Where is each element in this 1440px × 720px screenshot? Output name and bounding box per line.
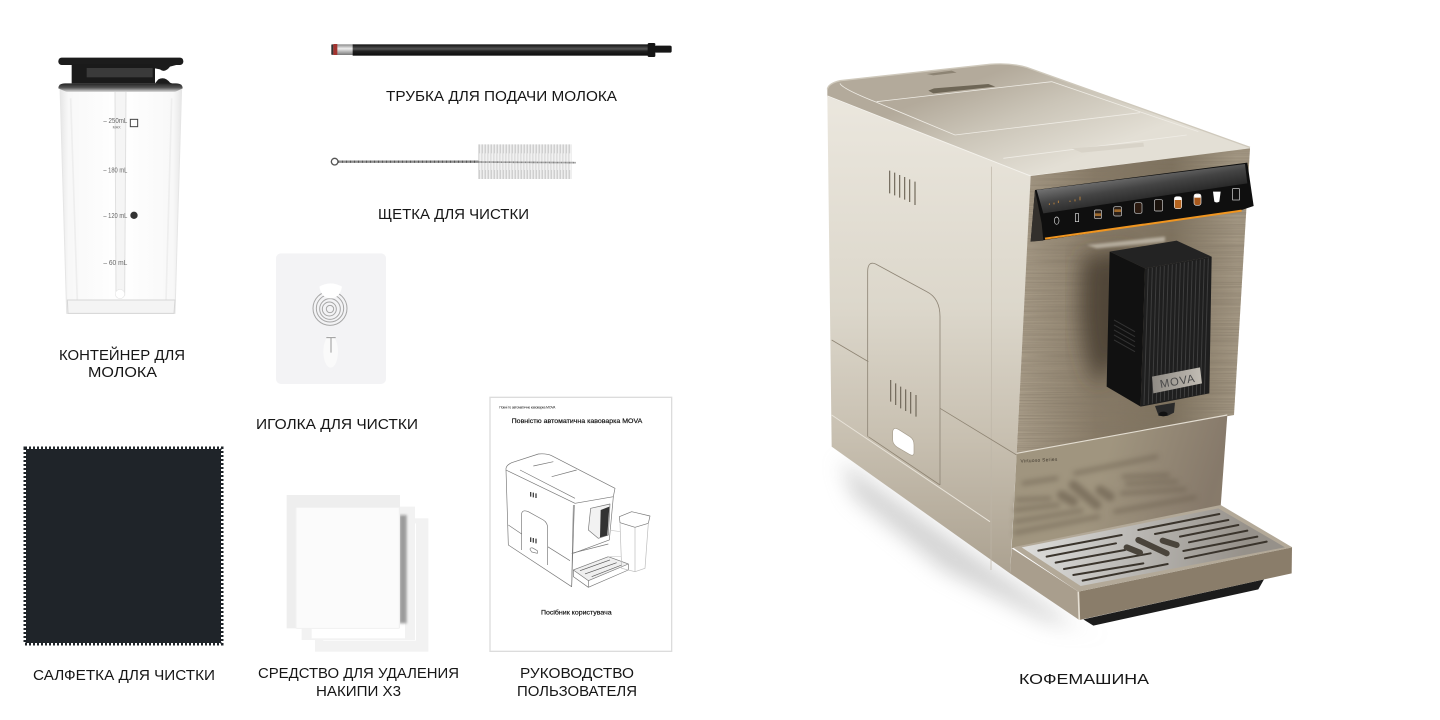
- label: milk tube: ТРУБКА ДЛЯ ПОДАЧИ МОЛОКА: [386, 89, 617, 105]
- label: coffee machine: КОФЕМАШИНА: [1019, 672, 1149, 688]
- milk container: [58, 58, 183, 313]
- tray slots: [1038, 514, 1267, 581]
- lower panel: [1012, 415, 1227, 548]
- label: user manual: РУКОВОДСТВО: [520, 666, 634, 682]
- cleaning cloth: [25, 448, 222, 644]
- tray faces: [1010, 548, 1079, 620]
- top surface: [827, 64, 1250, 176]
- manual text: Повні те автоматичне кавоварка MOVA: [499, 406, 556, 410]
- milk tube: [331, 43, 672, 57]
- label: milk container: [59, 346, 185, 381]
- cleaning brush: [331, 158, 576, 165]
- drip tray: [1010, 505, 1292, 626]
- manual text: Повністю автоматична кавоварка MOVA: [512, 419, 642, 425]
- logo plate: MOVA: [1159, 373, 1196, 391]
- volume markings: – 250mL: [103, 116, 127, 125]
- label: cleaning cloth: САЛФЕТКА ДЛЯ ЧИСТКИ: [33, 668, 215, 684]
- manual text: [499, 406, 642, 617]
- series text: Virtuoso Series: [1020, 457, 1058, 464]
- jug base: [67, 300, 175, 313]
- tray foot: [1083, 579, 1264, 626]
- volume markings: – 60 mL: [103, 258, 127, 267]
- volume markings: MAX: [113, 126, 121, 130]
- volume markings: [103, 116, 138, 267]
- label: descaler: НАКИПИ Х3: [316, 684, 401, 700]
- label: cleaning needle: ИГОЛКА ДЛЯ ЧИСТКИ: [256, 417, 418, 433]
- label: descaler: СРЕДСТВО ДЛЯ УДАЛЕНИЯ: [258, 666, 459, 682]
- service door: [868, 263, 940, 485]
- tray top: [1013, 505, 1292, 592]
- label: milk container: МОЛОКА: [88, 365, 157, 381]
- jug body: [60, 87, 182, 313]
- manual text: Посібник користувача: [541, 611, 612, 617]
- descaler sachets: [287, 495, 428, 652]
- volume markings: – 180 mL: [103, 166, 127, 175]
- vents: [890, 171, 916, 417]
- user manual: [490, 397, 672, 651]
- label: user manual: [517, 666, 637, 700]
- label: user manual: ПОЛЬЗОВАТЕЛЯ: [517, 684, 637, 700]
- cleaning needle card: [276, 253, 386, 384]
- manual machine line drawing: [506, 454, 650, 587]
- label: cleaning brush: ЩЕТКА ДЛЯ ЧИСТКИ: [378, 207, 529, 223]
- needle coil: [313, 291, 347, 325]
- inner milk tube: [115, 90, 126, 295]
- volume markings: – 120 mL: [103, 211, 127, 220]
- jug lid: [58, 58, 183, 92]
- label: milk container: КОНТЕЙНЕР ДЛЯ: [59, 346, 185, 364]
- drawer handle: [893, 428, 914, 455]
- status lights: [1049, 197, 1080, 205]
- coffee machine: [827, 64, 1292, 637]
- nozzle: [1155, 403, 1175, 416]
- side panel: [827, 97, 1031, 573]
- control panel: [1031, 163, 1254, 242]
- floor shadow: [840, 460, 1110, 637]
- logo plate: [1152, 367, 1202, 393]
- front panel: [1017, 148, 1250, 453]
- label: descaler: [258, 666, 459, 700]
- milk spout unit: [1107, 241, 1212, 416]
- drink icons: [1054, 189, 1239, 224]
- drip tray reflection: [1015, 457, 1195, 533]
